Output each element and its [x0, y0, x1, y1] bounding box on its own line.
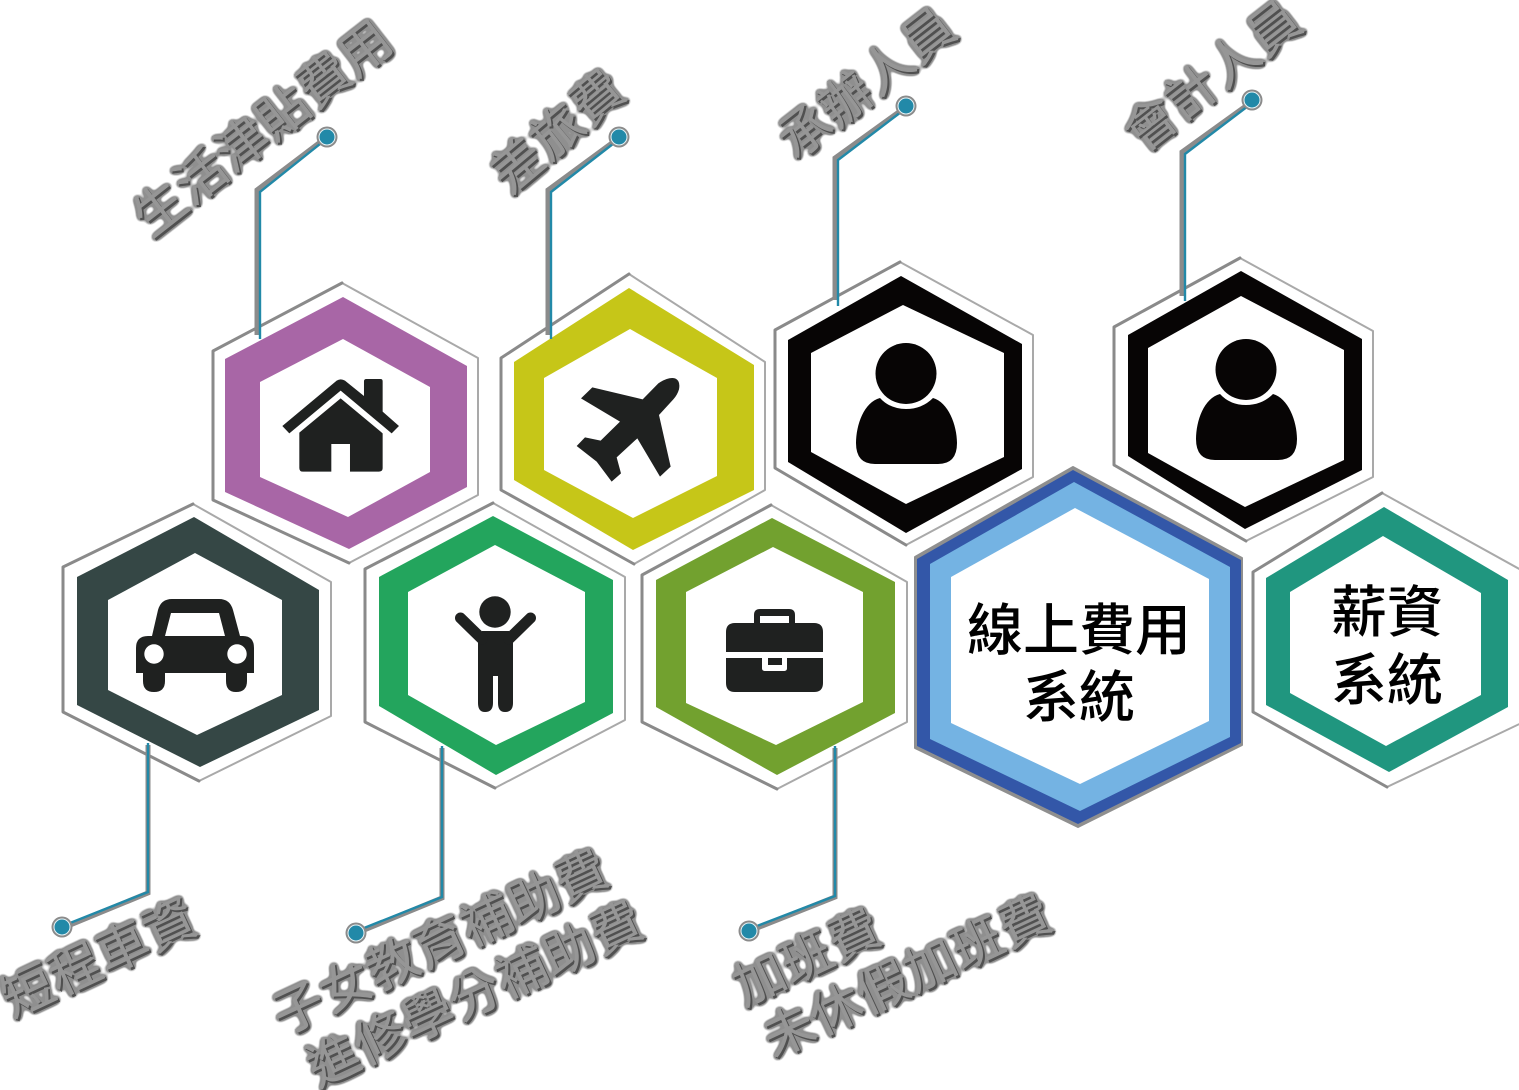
label: child education subsidy: 子女教育補助費: [264, 841, 618, 1047]
icon: house: [282, 379, 399, 472]
label: unused leave overtime pay: 未休假加班費: [754, 886, 1062, 1070]
leader: handler: [835, 96, 916, 306]
label: overtime pay: 加班費: [725, 900, 891, 1018]
leader: overtime: [738, 746, 835, 942]
title: online expense system: 線上費用: [967, 598, 1191, 662]
hexagon: online expense system: [915, 467, 1242, 827]
icon: child figure: [460, 596, 530, 712]
leader: short-trip fare: [52, 743, 148, 938]
title: online expense system: 系統: [1023, 666, 1135, 728]
leader: travel expenses: [548, 126, 630, 339]
hexagon: travel expenses (plane): [501, 274, 765, 564]
icon: airplane: [577, 378, 679, 482]
icon: car: [136, 599, 254, 692]
label: travel expenses: 差旅費: [481, 61, 637, 205]
leader: accountant: [1182, 90, 1262, 301]
icon: person: [856, 343, 957, 464]
title: payroll system: 薪資: [1331, 580, 1443, 644]
hexagon: overtime (briefcase): [642, 505, 907, 789]
leader: child education: [346, 746, 442, 944]
title: payroll system: 系統: [1331, 648, 1443, 712]
hexagon: child education (figure): [365, 503, 625, 788]
hexagon: short-trip fare (car): [63, 504, 331, 781]
hexagon: payroll system: [1253, 493, 1519, 787]
icon: briefcase: [726, 609, 823, 692]
hexagon: living allowance (house): [213, 283, 478, 563]
label: handler: 承辦人員: [768, 0, 968, 172]
hexagon: accountant (person): [1114, 258, 1373, 541]
icon: person: [1196, 339, 1297, 460]
leader: living allowance: [257, 126, 338, 339]
label: living allowance: 生活津貼費用: [123, 11, 405, 249]
hexagon: handler (person): [775, 262, 1033, 545]
